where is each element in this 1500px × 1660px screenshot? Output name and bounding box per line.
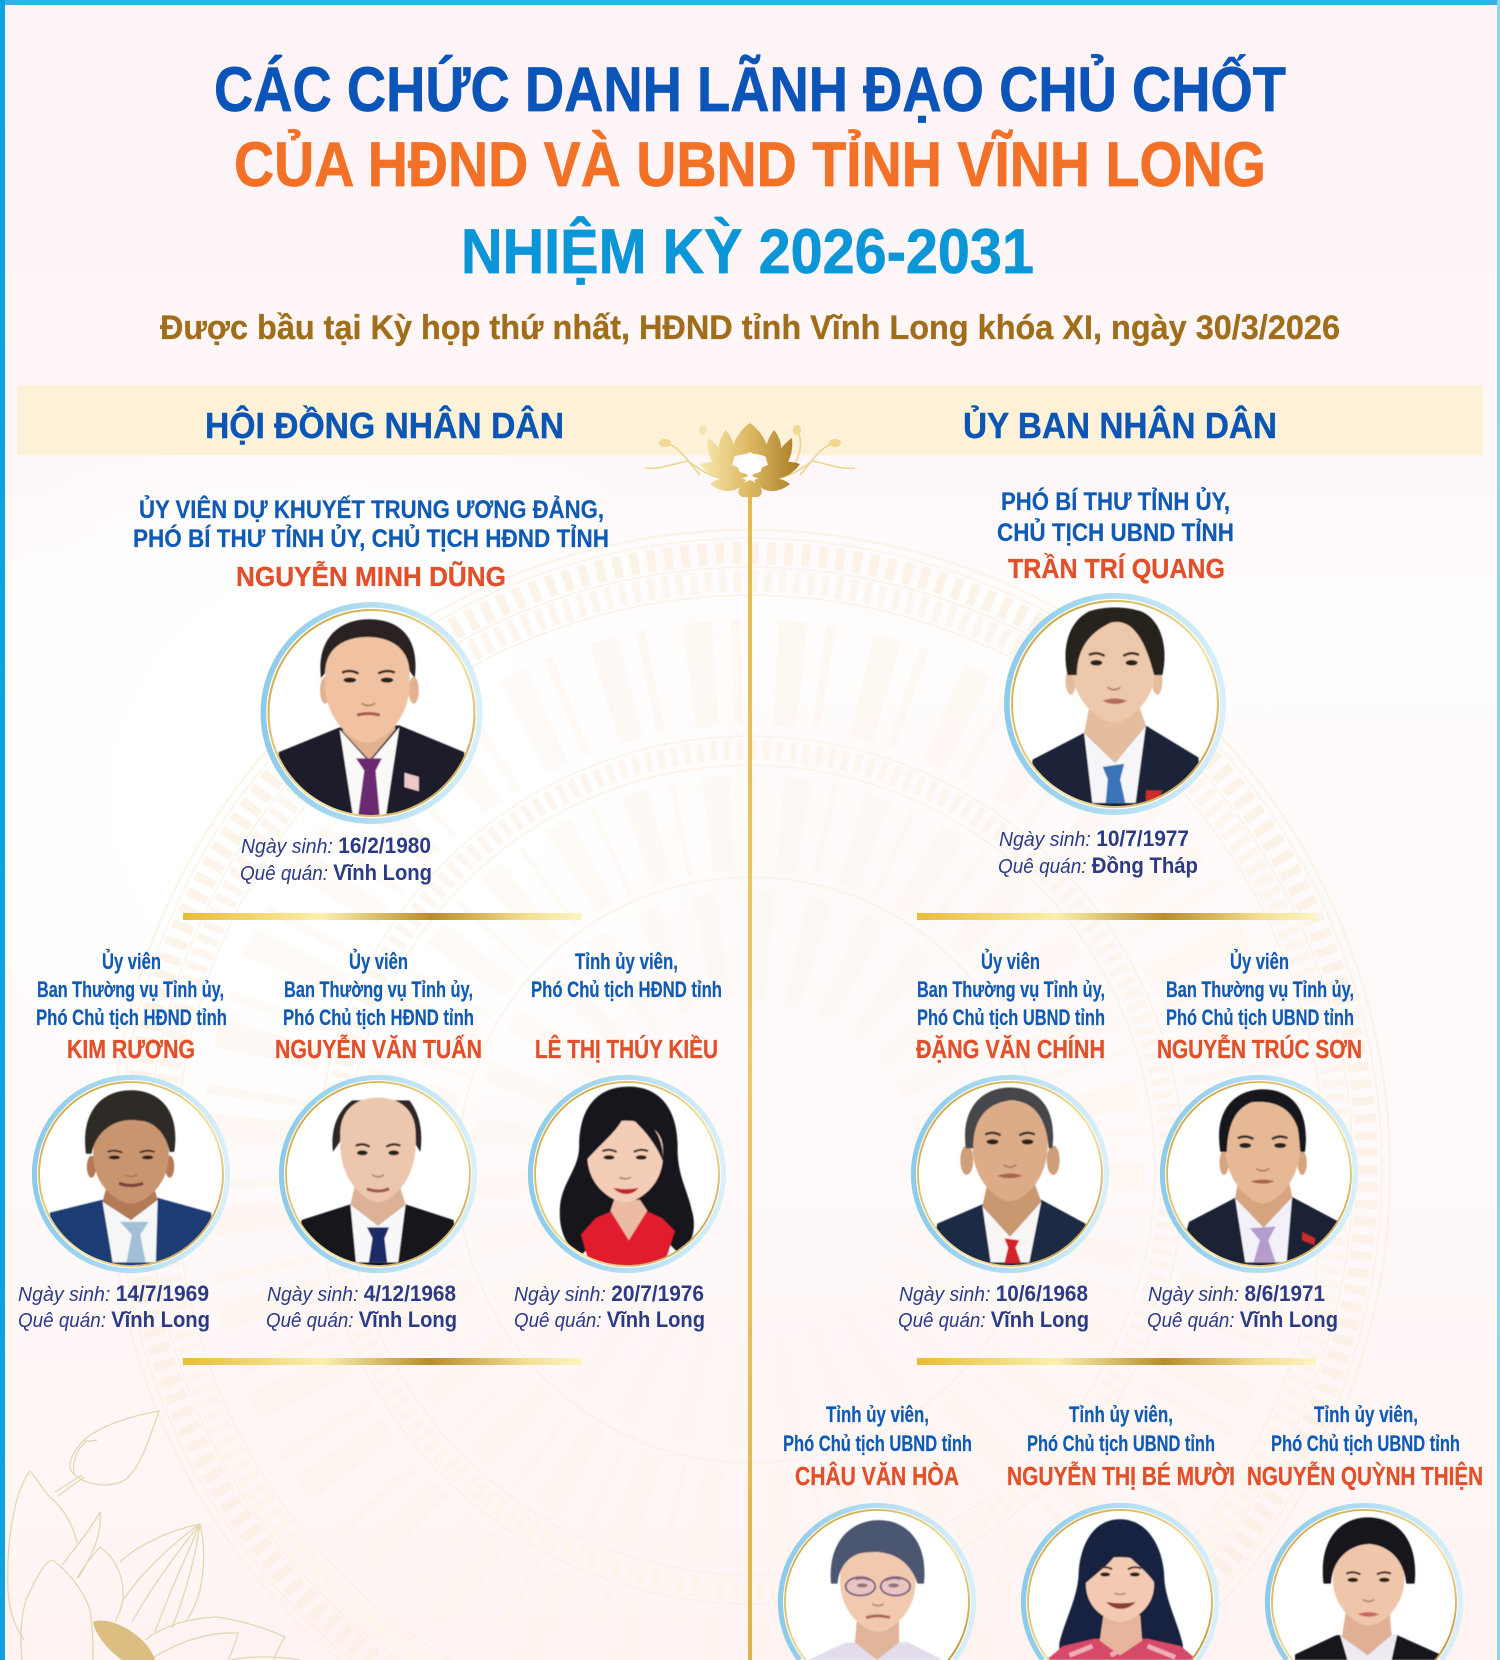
middle petal [77, 1547, 123, 1622]
birth info: Quê quán: Vĩnh Long [266, 1307, 457, 1332]
name: NGUYỄN TRÚC SƠN [1157, 1034, 1362, 1064]
name: ĐẶNG VĂN CHÍNH [916, 1034, 1105, 1064]
birth info: Ngày sinh: 20/7/1976 [514, 1281, 704, 1306]
portrait [1023, 1505, 1217, 1660]
role: Tỉnh ủy viên, [1314, 1402, 1418, 1427]
birth info: Quê quán: Vĩnh Long [18, 1307, 210, 1332]
role: Phó Chủ tịch HĐND tỉnh [531, 977, 722, 1002]
right petals [145, 1617, 300, 1660]
divider: right row 1 [917, 913, 1316, 920]
panel: Nguyễn Trúc Sơn [1147, 949, 1362, 1332]
role [997, 486, 1234, 547]
front petal [21, 1560, 93, 1660]
divider: left row 2 [183, 1358, 582, 1365]
panel: Châu Văn Hòa [780, 1402, 974, 1660]
portrait [1267, 1505, 1461, 1660]
role: Ủy viên [981, 949, 1040, 974]
panel: Đặng Văn Chính [898, 949, 1107, 1332]
icon: lotus seed pod [93, 1620, 155, 1660]
name: NGUYỄN THỊ BÉ MƯỜI [1007, 1461, 1235, 1491]
name: CHÂU VĂN HÒA [795, 1461, 959, 1491]
role: Tỉnh ủy viên, [1069, 1402, 1173, 1427]
role: PHÓ BÍ THƯ TỈNH ỦY, CHỦ TỊCH HĐND TỈNH [133, 523, 609, 553]
birth info: Quê quán: Vĩnh Long [1147, 1307, 1338, 1332]
petals [700, 423, 800, 497]
heading: Ủy ban nhân dân: ỦY BAN NHÂN DÂN [963, 404, 1277, 446]
birth info: Ngày sinh: 10/7/1977 [999, 826, 1189, 851]
role: Tỉnh ủy viên, [575, 949, 678, 974]
bud [70, 1411, 159, 1485]
birth info [514, 1281, 705, 1332]
birth info [898, 1281, 1089, 1332]
birth info [1147, 1281, 1338, 1332]
sprigs [645, 430, 855, 480]
role: Phó Chủ tịch UBND tỉnh [917, 1005, 1105, 1030]
role: Ủy viên [349, 949, 408, 974]
birth info [18, 1281, 210, 1332]
big back petal [8, 1471, 77, 1640]
role: Tỉnh ủy viên, [826, 1402, 929, 1427]
birth info: Ngày sinh: 8/6/1971 [1148, 1281, 1325, 1306]
role: Ủy viên [1230, 949, 1289, 974]
birth info: Ngày sinh: 4/12/1968 [267, 1281, 456, 1306]
birth info [998, 826, 1198, 878]
role: Ban Thường vụ Tỉnh ủy, [1166, 977, 1354, 1002]
portrait [34, 1077, 228, 1271]
icon: golden lotus [645, 423, 855, 497]
title: CỦA HĐND VÀ UBND TỈNH VĨNH LONG [234, 129, 1266, 200]
panel: Lê Thị Thúy Kiều [514, 949, 724, 1332]
birth info: Ngày sinh: 10/6/1968 [899, 1281, 1088, 1306]
panel: Nguyễn Thị Bé Mười [1007, 1402, 1235, 1660]
title: CÁC CHỨC DANH LÃNH ĐẠO CHỦ CHỐT [214, 54, 1286, 125]
portrait [530, 1077, 724, 1271]
portrait [281, 1077, 475, 1271]
role: Phó Chủ tịch UBND tỉnh [1027, 1431, 1215, 1456]
role [917, 949, 1105, 1030]
role [1271, 1402, 1460, 1456]
panel: Nguyễn Quỳnh Thiện [1247, 1402, 1483, 1660]
role [1166, 949, 1354, 1030]
role: PHÓ BÍ THƯ TỈNH ỦY, [1001, 486, 1230, 516]
striped petal [120, 1524, 204, 1632]
portrait [913, 1077, 1107, 1271]
header band [17, 385, 1483, 455]
name: NGUYỄN VĂN TUẤN [275, 1034, 482, 1064]
birth info: Quê quán: Vĩnh Long [240, 860, 432, 885]
role: Phó Chủ tịch UBND tỉnh [1166, 1005, 1354, 1030]
name: TRẦN TRÍ QUANG [1008, 553, 1225, 584]
birth info: Quê quán: Vĩnh Long [898, 1307, 1089, 1332]
role: CHỦ TỊCH UBND TỈNH [997, 517, 1234, 547]
role: ỦY VIÊN DỰ KHUYẾT TRUNG ƯƠNG ĐẢNG, [139, 494, 604, 524]
portrait [1162, 1077, 1356, 1271]
role: Ban Thường vụ Tỉnh ủy, [37, 977, 224, 1002]
birth info [266, 1281, 457, 1332]
role [1027, 1402, 1215, 1456]
decoration: outline lotus bottom left [8, 1411, 300, 1660]
portrait [263, 605, 480, 821]
role: Ban Thường vụ Tỉnh ủy, [917, 977, 1105, 1002]
role: Phó Chủ tịch HĐND tỉnh [36, 1005, 227, 1030]
divider: left row 1 [183, 913, 582, 920]
role: Phó Chủ tịch HĐND tỉnh [283, 1005, 474, 1030]
background drum pattern [115, 529, 1391, 1660]
role: Phó Chủ tịch UBND tỉnh [783, 1431, 972, 1456]
center vertical line [748, 490, 752, 1660]
birth info: Quê quán: Vĩnh Long [514, 1307, 705, 1332]
panel: HĐND chairman [133, 494, 609, 885]
role: Ủy viên [102, 949, 161, 974]
divider: right row 2 [917, 1358, 1316, 1365]
role [283, 949, 474, 1030]
name: LÊ THỊ THÚY KIỀU [535, 1034, 718, 1064]
spike [62, 1512, 100, 1578]
title: NHIỆM KỲ 2026-2031 [461, 216, 1034, 287]
birth info: Ngày sinh: 14/7/1969 [18, 1281, 209, 1306]
white bud [739, 452, 761, 474]
role: Ban Thường vụ Tỉnh ủy, [284, 977, 473, 1002]
title [214, 54, 1286, 287]
panel: Nguyễn Văn Tuấn [266, 949, 482, 1332]
panel: Kim Rương [18, 949, 228, 1332]
portrait [1007, 596, 1223, 812]
panel: UBND chairman [997, 486, 1234, 878]
name: NGUYỄN MINH DŨNG [236, 561, 506, 592]
birth info: Quê quán: Đồng Tháp [998, 853, 1198, 878]
birth info: Ngày sinh: 16/2/1980 [241, 833, 431, 858]
role [133, 494, 609, 553]
heading: Hội đồng nhân dân: HỘI ĐỒNG NHÂN DÂN [205, 404, 564, 446]
name: KIM RƯƠNG [67, 1034, 195, 1064]
birth info [240, 833, 432, 885]
role [36, 949, 227, 1030]
portrait [780, 1505, 974, 1660]
role [783, 1402, 972, 1456]
subtitle: Được bầu tại Kỳ họp thứ nhất, HĐND tỉnh Vĩnh Long khóa XI, ngày 30/3/2026 [160, 309, 1340, 347]
role [531, 949, 722, 1002]
